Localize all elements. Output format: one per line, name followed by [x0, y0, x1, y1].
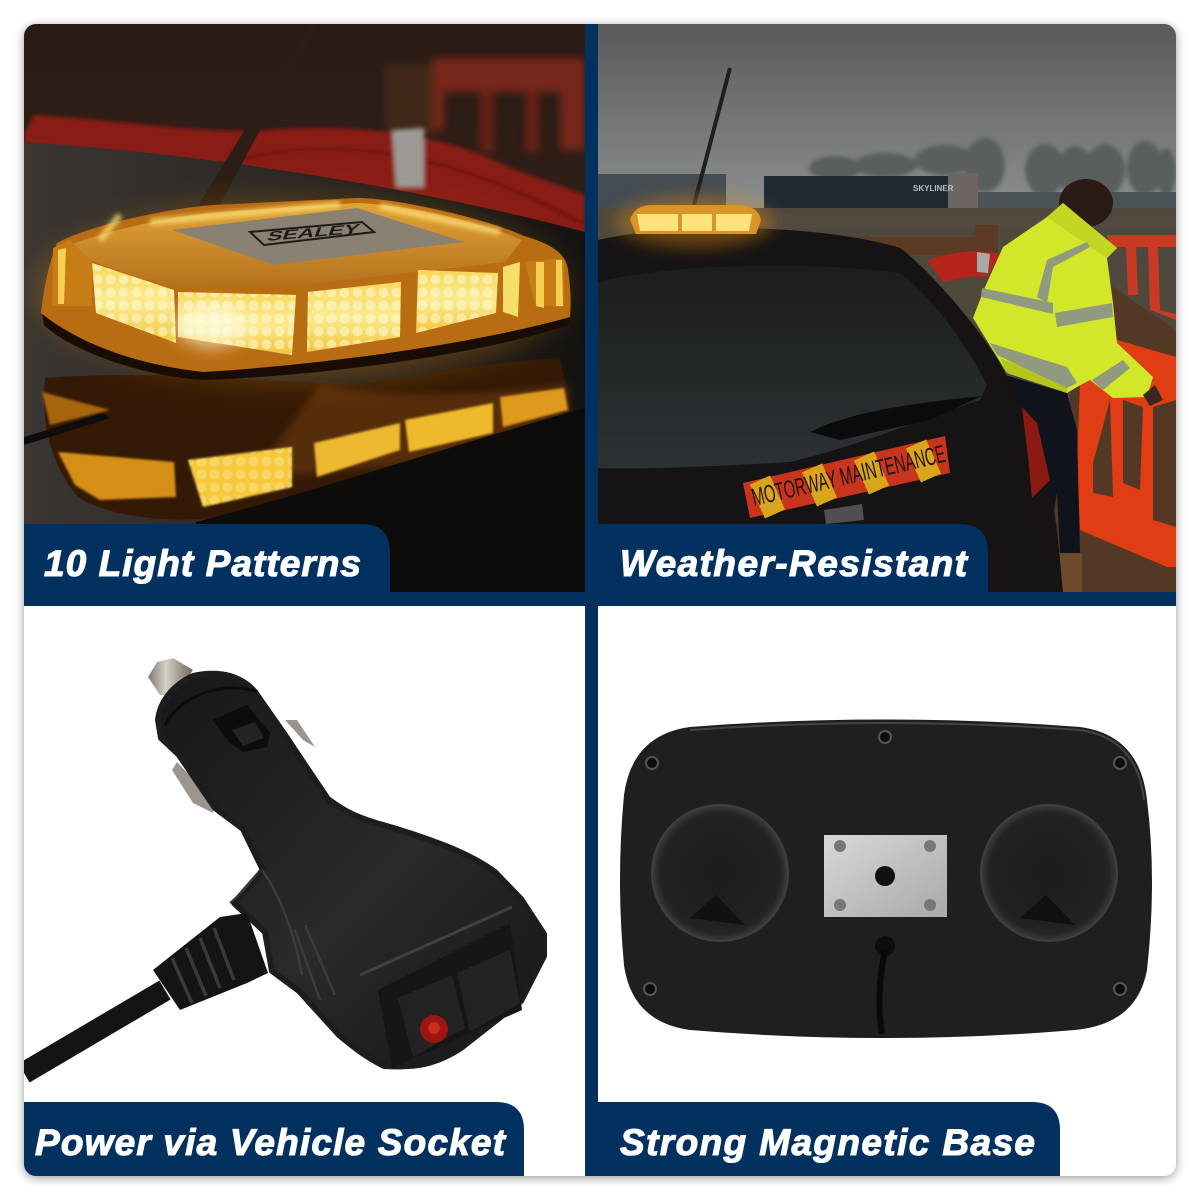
side slider [212, 705, 270, 752]
label tab: 10 Light Patterns [24, 524, 390, 606]
lens body [41, 198, 571, 372]
trousers [1006, 376, 1080, 553]
light bar [41, 198, 571, 380]
second switch [457, 950, 520, 1032]
boot [1060, 553, 1082, 592]
base [42, 312, 570, 380]
right suction cup [981, 805, 1117, 941]
light bar glow [35, 200, 565, 380]
base rim highlight [690, 723, 1144, 800]
motorway maintenance sticker [743, 436, 950, 518]
base body [620, 720, 1152, 1038]
label tab: 10 Light Patterns: 10 Light Patterns [44, 543, 361, 584]
metal tip [148, 658, 193, 695]
plug head ring and highlights [165, 688, 258, 725]
fence boards [852, 225, 998, 255]
panel: weather-resistant photo [598, 24, 1176, 592]
cable grommet and cable [875, 936, 895, 1034]
dirt mound [1054, 286, 1176, 592]
car roof [24, 142, 585, 524]
distant buildings [598, 174, 726, 208]
lower car body panel [196, 408, 585, 592]
cable [24, 990, 165, 1073]
label tab: Strong Magnetic Base [585, 1102, 1060, 1176]
rear window [598, 266, 987, 469]
motorway maintenance sticker: MOTORWAY MAINTENANCE [749, 440, 948, 512]
lens top highlights [62, 203, 522, 288]
antenna [198, 128, 261, 206]
reflection of light bar [42, 358, 570, 519]
label tab: Weather-Resistant: Weather-Resistant [620, 543, 969, 584]
strain relief [153, 913, 268, 1010]
field [598, 208, 1176, 403]
panel: 10 light patterns photo [24, 24, 585, 592]
reflective stripes [981, 242, 1130, 390]
distant trees [809, 138, 1176, 196]
hair [1059, 179, 1113, 227]
mounting plate [824, 835, 947, 917]
panel: power via vehicle socket product [24, 658, 544, 1073]
vertical divider [585, 24, 598, 1124]
tail light [1022, 407, 1050, 498]
jacket [973, 203, 1153, 398]
plug body [158, 674, 544, 1066]
label tab: Power via Vehicle Socket: Power via Vehicle Socket [35, 1122, 507, 1163]
panel: strong magnetic base product [620, 720, 1152, 1038]
LED modules [92, 263, 176, 343]
panel: weather-resistant photo: SKYLINER [913, 184, 954, 193]
wiper [810, 396, 982, 440]
left suction cup [652, 805, 788, 941]
red cable on car [927, 251, 1000, 282]
metal side clips [172, 720, 315, 813]
car badge [824, 504, 864, 524]
worker in hi-vis jacket [973, 179, 1163, 592]
horizontal divider [24, 592, 1176, 606]
label tab: Strong Magnetic Base: Strong Magnetic Base [620, 1122, 1035, 1163]
back red barrier [1107, 235, 1176, 320]
SEALEY logo plate: SEALEY [265, 221, 362, 244]
label tab: Power via Vehicle Socket [24, 1102, 524, 1176]
housing screws [644, 731, 1126, 995]
far tree line strip [978, 192, 1176, 208]
SEALEY logo plate [250, 221, 374, 245]
red cable coil [24, 115, 585, 240]
front red barrier [1077, 340, 1176, 567]
car light bar [615, 196, 775, 248]
hand [1143, 385, 1163, 406]
label tab: Weather-Resistant [598, 524, 988, 606]
switch housing [378, 923, 522, 1068]
red barrier in background [385, 58, 585, 152]
antenna [694, 68, 730, 205]
top label plate [172, 208, 464, 265]
car body [598, 228, 1063, 592]
power switch [398, 975, 465, 1057]
